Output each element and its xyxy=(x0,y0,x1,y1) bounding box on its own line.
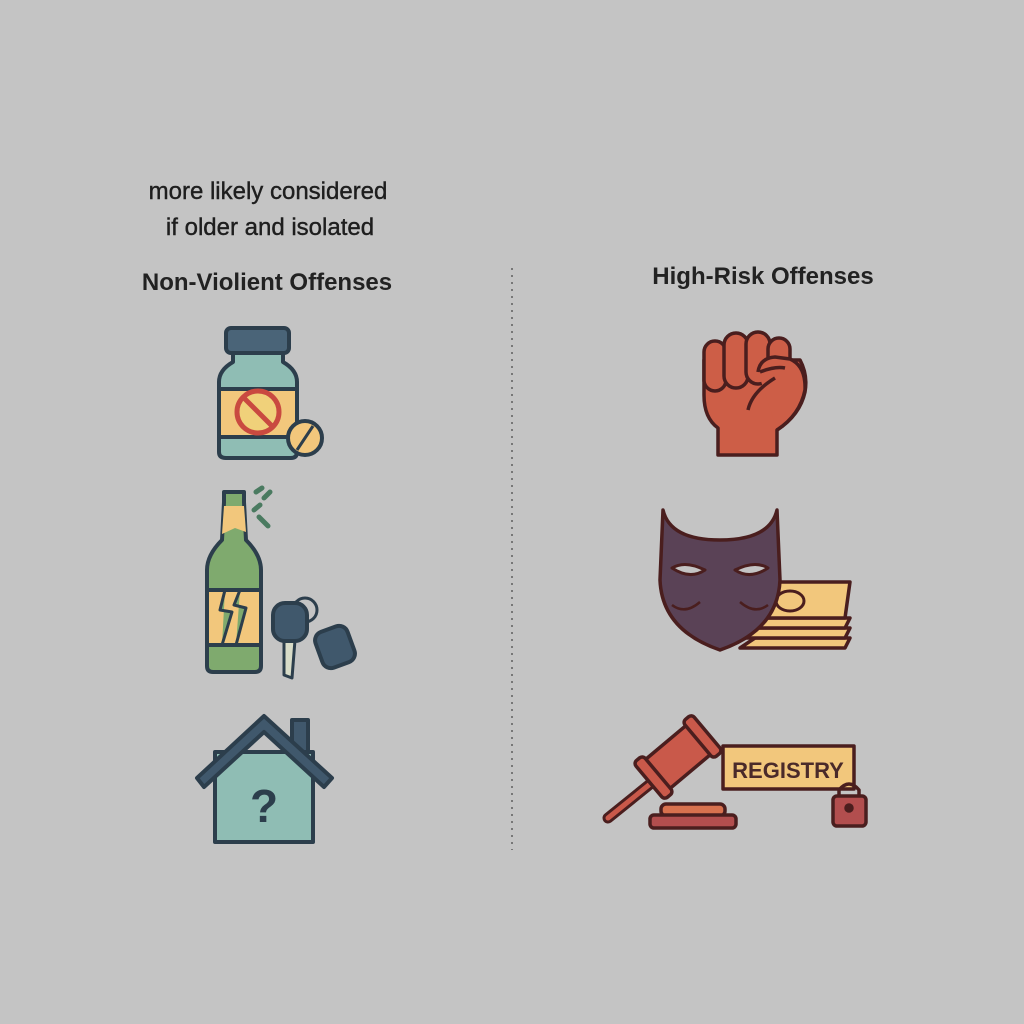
note text xyxy=(149,178,387,241)
heading: non-violent: Non-Violient Offenses xyxy=(142,269,392,296)
icon: house: ? xyxy=(250,780,278,832)
icon: gavel and registry: REGISTRY xyxy=(732,758,844,783)
icon: gavel and registry xyxy=(608,714,866,828)
note text: if older and isolated xyxy=(166,214,374,241)
icon: fist xyxy=(704,332,806,455)
heading: high-risk: High-Risk Offenses xyxy=(652,263,874,290)
icon: pill bottle xyxy=(219,328,322,458)
icon: mask with money xyxy=(660,510,850,650)
note text: more likely considered xyxy=(149,178,387,205)
icon: bottle and keys xyxy=(207,488,357,678)
icon: house xyxy=(197,716,332,842)
